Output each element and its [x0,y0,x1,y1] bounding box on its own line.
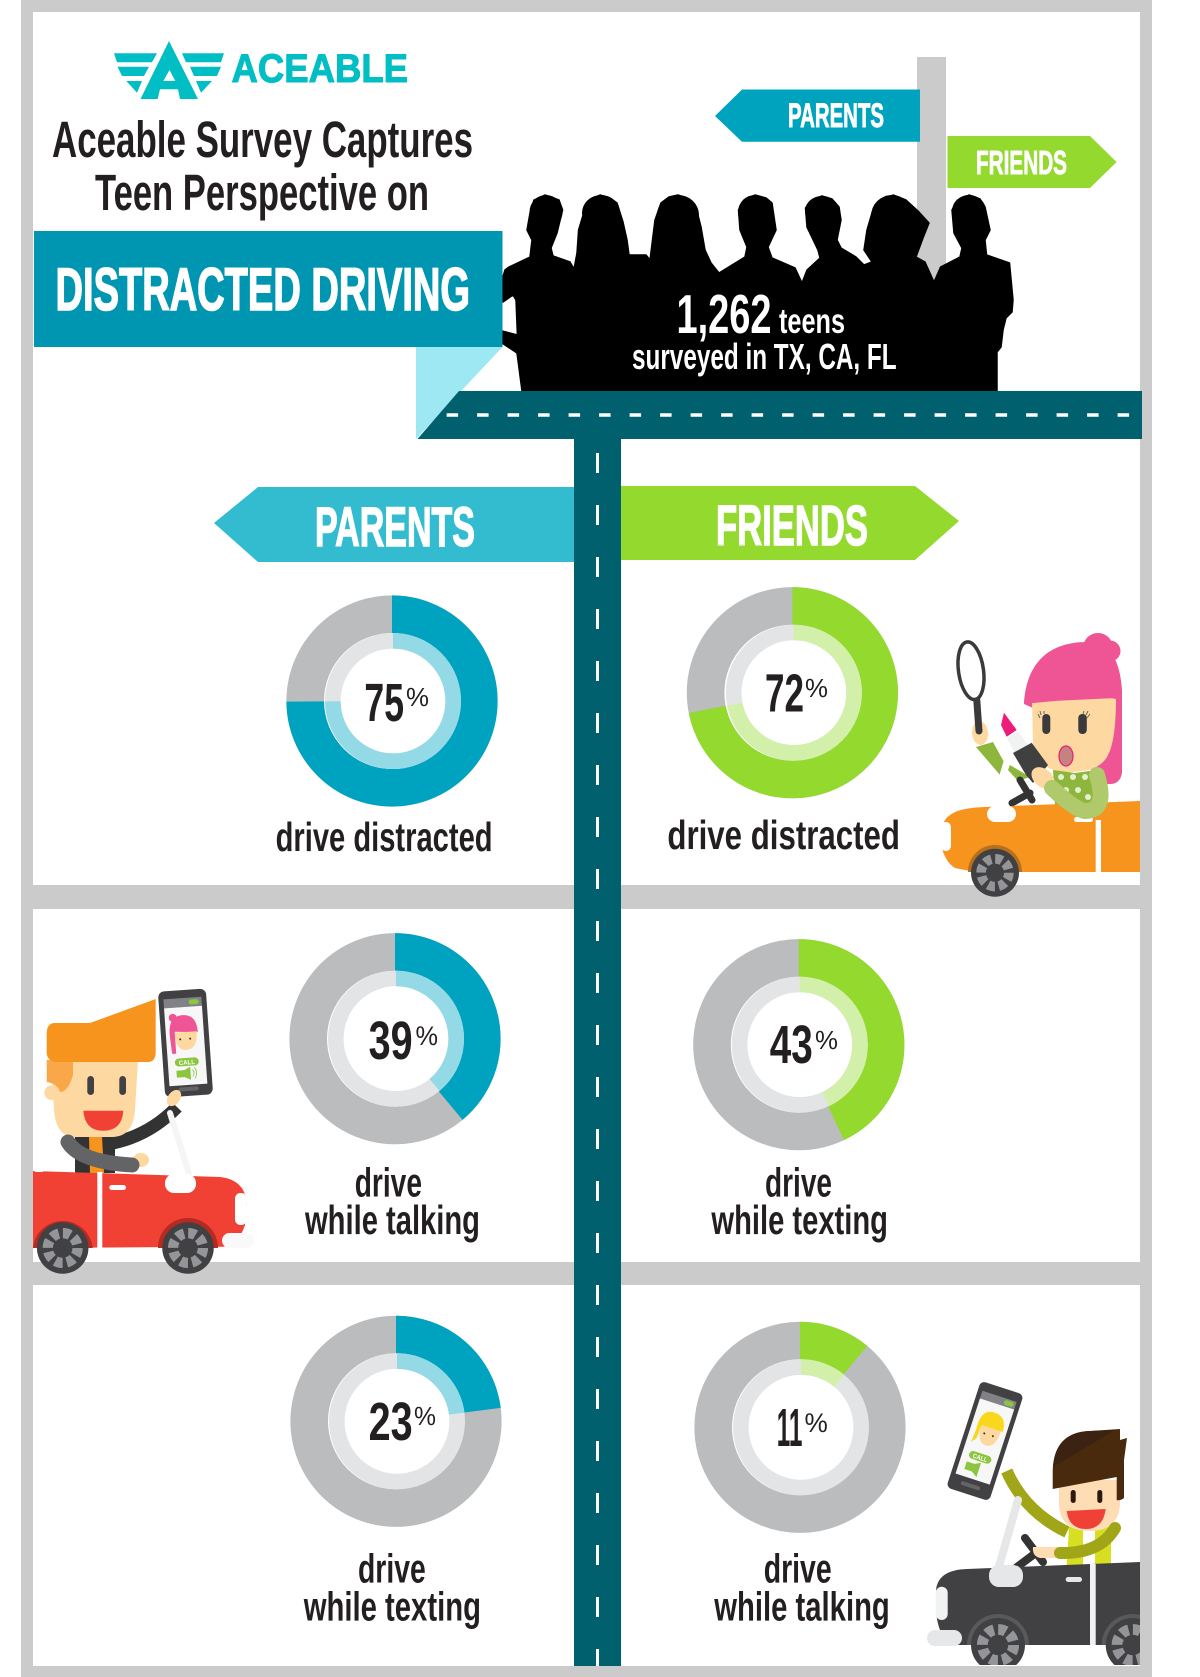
windshield pillar [993,757,1008,807]
arrow: parents heading: PARENTS [315,495,475,558]
lipstick [1001,713,1048,783]
hand [1027,763,1059,793]
value: 23%: 23 [369,1392,413,1452]
illustration: boy calling in red car [33,988,254,1274]
raised arm [113,1107,177,1143]
steering wheel [1012,780,1032,803]
value: 11%: 11 [777,1398,802,1458]
value: 39%: % [416,1021,438,1051]
donut: 11% [713,1340,887,1514]
panel: parents drive while talking [304,952,482,1243]
arrow: friends heading: FRIENDS [716,494,868,558]
raised arm [1007,1471,1067,1532]
label [711,1160,888,1243]
label: while texting [711,1197,888,1243]
label: drive [358,1546,426,1592]
raised arm [976,742,1004,775]
road sign: friends small [948,136,1117,188]
label: drive distracted [667,812,900,858]
title: Teen Perspective on [95,164,429,221]
value: 75%: 75 [364,673,404,733]
logo: Aceable [114,41,408,99]
eyes [1071,1490,1076,1503]
road sign: friends small: FRIENDS [976,144,1067,181]
text: 1,262 teens surveyed: 1,262 [676,283,772,345]
mouth [1067,1509,1106,1529]
illustration: girl applying lipstick in orange car [941,633,1140,897]
text: 1,262 teens surveyed: surveyed in TX, CA, FL [632,336,897,377]
donut: 23% [309,1334,483,1508]
banner: distracted driving [34,231,502,347]
eyes [1042,714,1050,734]
label: while texting [303,1584,481,1630]
road sign: parents small [715,90,920,142]
panel: friends drive while texting [711,958,888,1243]
black car [927,1562,1140,1665]
shirt [1053,770,1097,805]
donut: 72% [706,606,879,780]
panel: parents drive while texting [303,1334,483,1630]
value: 11%: % [804,1408,828,1438]
orange car [941,801,1140,872]
open mouth [1059,746,1073,766]
hair [1053,1429,1127,1500]
phone [946,1381,1024,1501]
eyes [87,1076,94,1095]
label: drive [765,1160,832,1206]
value: 72%: % [805,673,828,703]
driving arm [1033,1547,1060,1558]
label: while talking [714,1584,890,1630]
title [52,111,473,221]
phone [158,988,213,1098]
silhouette of teens [502,195,1013,391]
road sign: parents small: PARENTS [788,97,884,135]
donut: 75% [305,614,479,788]
sleeve [1052,775,1101,811]
hand on phone [164,1087,184,1109]
label: drive distracted [276,814,493,860]
value: 43%: % [815,1025,838,1055]
logo: Aceable: ACEABLE [232,47,408,91]
label: while talking [304,1197,480,1243]
arrow: friends heading [621,486,959,560]
illustration: guy calling in black car [927,1382,1140,1665]
panel: parents drive distracted [276,614,493,860]
hair back [1024,642,1122,784]
value: 43%: 43 [770,1015,813,1075]
hand mirror [955,640,987,731]
head [1059,1480,1120,1531]
suit body [75,1135,115,1173]
panel: friends drive while talking [713,1340,890,1630]
label: drive [355,1160,422,1206]
mouth [83,1111,123,1131]
banner: distracted driving: DISTRACTED DRIVING [56,256,470,323]
phone: CALL [179,1059,195,1067]
title: Aceable Survey Captures [52,111,473,168]
label [303,1546,481,1630]
donut: 39% [308,952,482,1126]
label [304,1160,480,1243]
value: 23%: % [414,1401,436,1431]
label: drive [764,1546,832,1592]
label [714,1546,890,1630]
vest and shirt [1067,1527,1111,1565]
signpost post [917,57,946,307]
value: 72%: 72 [765,664,804,724]
value: 39%: 39 [369,1011,413,1071]
red car [33,1171,247,1248]
road [418,391,1142,1666]
text: 1,262 teens surveyed: teens [779,302,845,341]
donut: 43% [712,958,886,1132]
value: 75%: % [406,682,429,712]
face [1032,698,1116,772]
pillar and steering wheel [1017,1538,1043,1567]
text: 1,262 teens surveyed [632,283,897,377]
head [51,1060,138,1137]
lower arm and hand [133,1153,149,1167]
phone: CALL [972,1453,988,1464]
panel: friends drive distracted [667,606,900,858]
banner fold [416,347,502,439]
hair [47,1060,73,1092]
arrow: parents heading [214,487,574,562]
